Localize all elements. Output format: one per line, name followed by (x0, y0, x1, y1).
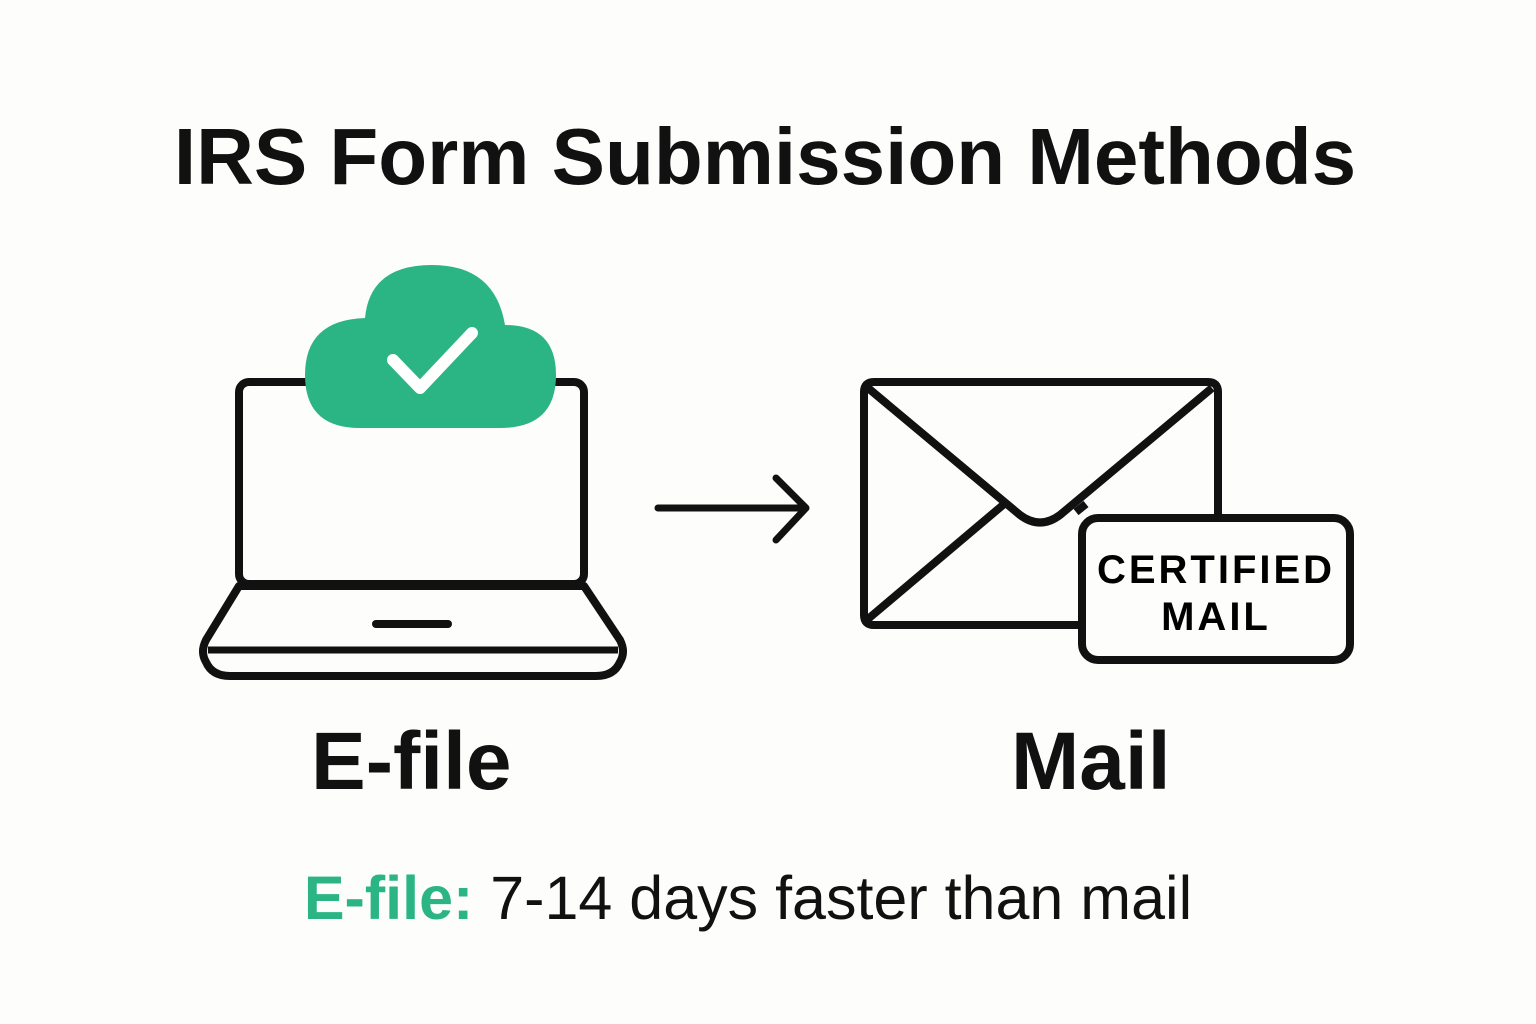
icon: cloud check (305, 265, 556, 428)
icon: envelope with certified mail badge: MAIL (1161, 595, 1271, 639)
label: Mail: Mail (1011, 716, 1170, 807)
caption: E-file: 7-14 days faster than mail (304, 864, 1192, 932)
title: IRS Form Submission Methods (174, 112, 1356, 201)
arrow (658, 478, 806, 540)
label: E-file: E-file (311, 716, 511, 807)
icon: envelope with certified mail badge (864, 382, 1350, 660)
icon: envelope with certified mail badge: CERTIFIED (1097, 548, 1335, 592)
